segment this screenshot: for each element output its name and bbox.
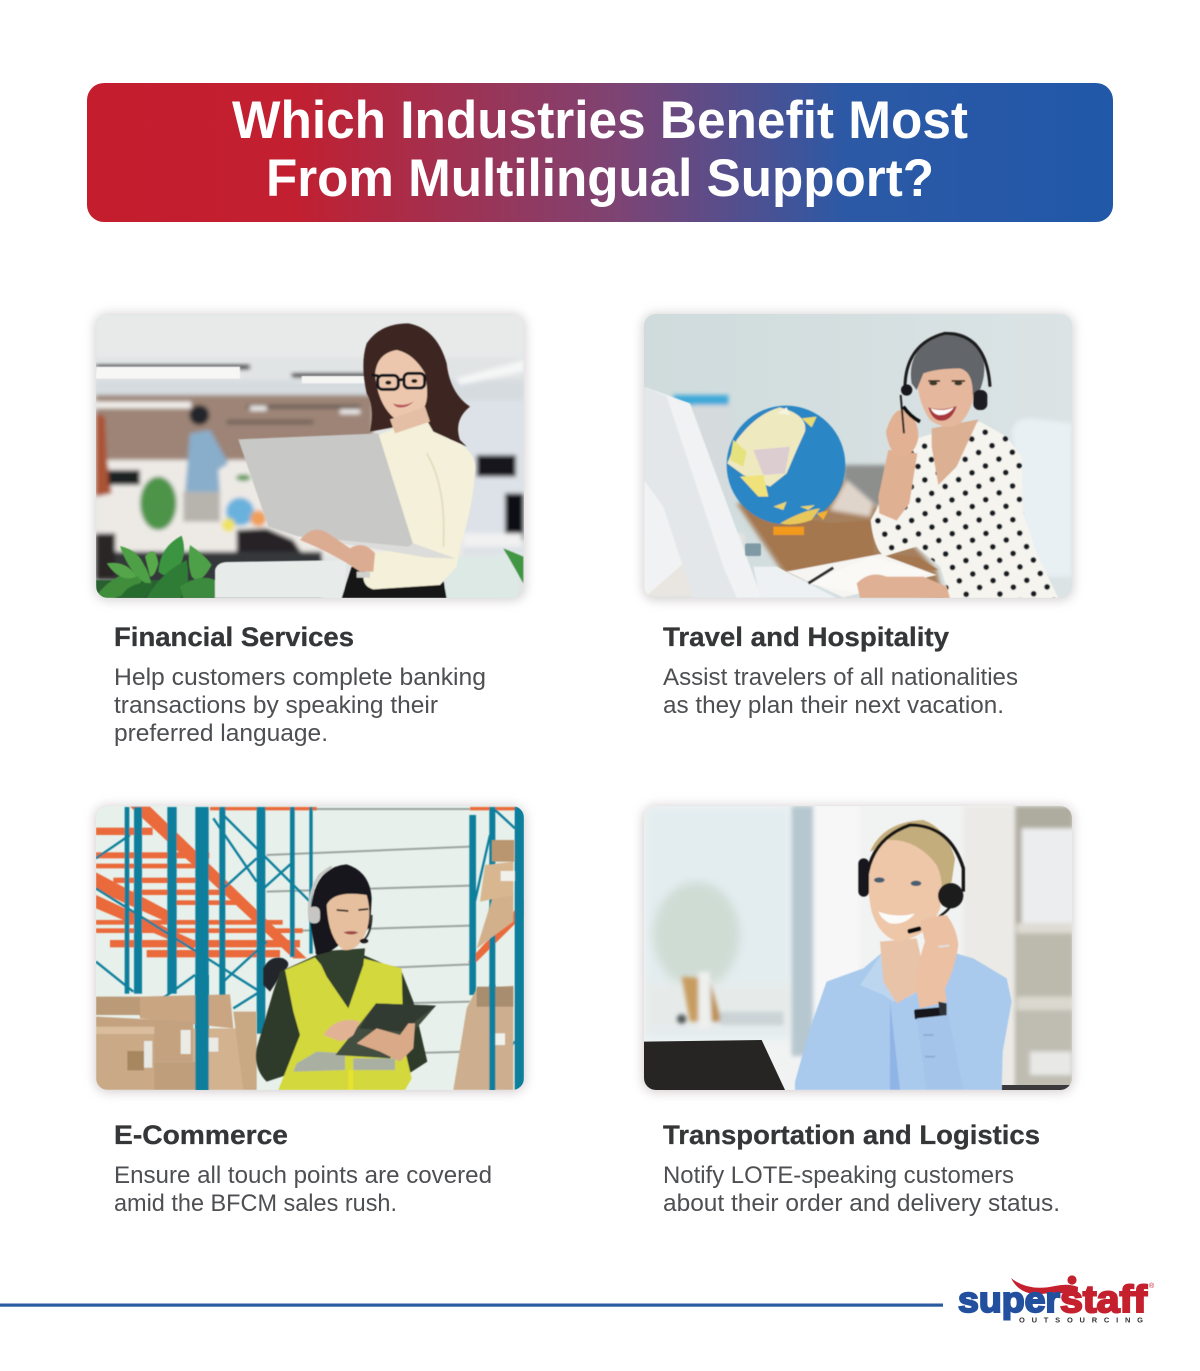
body: travel and hospitality: Assist travelers of all nationalities xyxy=(663,664,1018,691)
body: financial services: transactions by speaking their xyxy=(114,692,438,719)
logo: SuperStaff Outsourcing: OUTSOURCING xyxy=(1019,1316,1143,1324)
panel: e-commerce xyxy=(94,805,526,1217)
body: travel and hospitality: as they plan their next vacation. xyxy=(663,692,1004,719)
photo: woman with headset and globe xyxy=(642,313,1074,601)
heading: Financial Services: Financial Services xyxy=(114,622,354,652)
background worker xyxy=(263,958,288,992)
heading: Transportation and Logistics: Transportation and Logistics xyxy=(663,1120,1040,1150)
heading: Travel and Hospitality: Travel and Hospitality xyxy=(663,622,949,652)
body: transportation and logistics: about their order and delivery status. xyxy=(663,1190,1060,1217)
footer rule xyxy=(0,1304,943,1307)
body: e-commerce: amid the BFCM sales rush. xyxy=(114,1190,397,1217)
title xyxy=(232,91,968,208)
logo: SuperStaff Outsourcing: staff xyxy=(1060,1279,1147,1321)
body: transportation and logistics xyxy=(663,1162,1060,1217)
body: e-commerce: Ensure all touch points are covered xyxy=(114,1162,492,1189)
body: financial services: Help customers complete banking xyxy=(114,664,486,691)
photo: smiling agent with headset xyxy=(642,805,1074,1093)
logo: SuperStaff Outsourcing: ® xyxy=(1149,1282,1155,1290)
body: travel and hospitality xyxy=(663,664,1018,719)
logo wordmark: super xyxy=(958,1279,1060,1320)
title banner xyxy=(87,83,1113,222)
body: e-commerce xyxy=(114,1162,492,1217)
title: Which Industries Benefit Most xyxy=(232,91,968,150)
body: financial services xyxy=(114,664,486,747)
globe xyxy=(727,406,845,524)
panel: transportation and logistics xyxy=(642,805,1074,1217)
panel: financial services xyxy=(94,313,526,747)
body: transportation and logistics: Notify LOTE-speaking customers xyxy=(663,1162,1014,1189)
worker xyxy=(256,864,436,1090)
photo: warehouse worker with tablet xyxy=(94,805,526,1093)
logo: SuperStaff Outsourcing xyxy=(958,1275,1155,1324)
title: From Multilingual Support? xyxy=(266,149,934,208)
heading: E-Commerce: E-Commerce xyxy=(114,1120,288,1150)
body: financial services: preferred language. xyxy=(114,720,328,747)
papers xyxy=(787,554,937,597)
panel: travel and hospitality xyxy=(642,313,1074,719)
woman xyxy=(871,422,1058,598)
logo swoosh xyxy=(1011,1278,1078,1296)
photo: woman with laptop in office xyxy=(94,313,526,601)
agent xyxy=(795,820,1012,1090)
